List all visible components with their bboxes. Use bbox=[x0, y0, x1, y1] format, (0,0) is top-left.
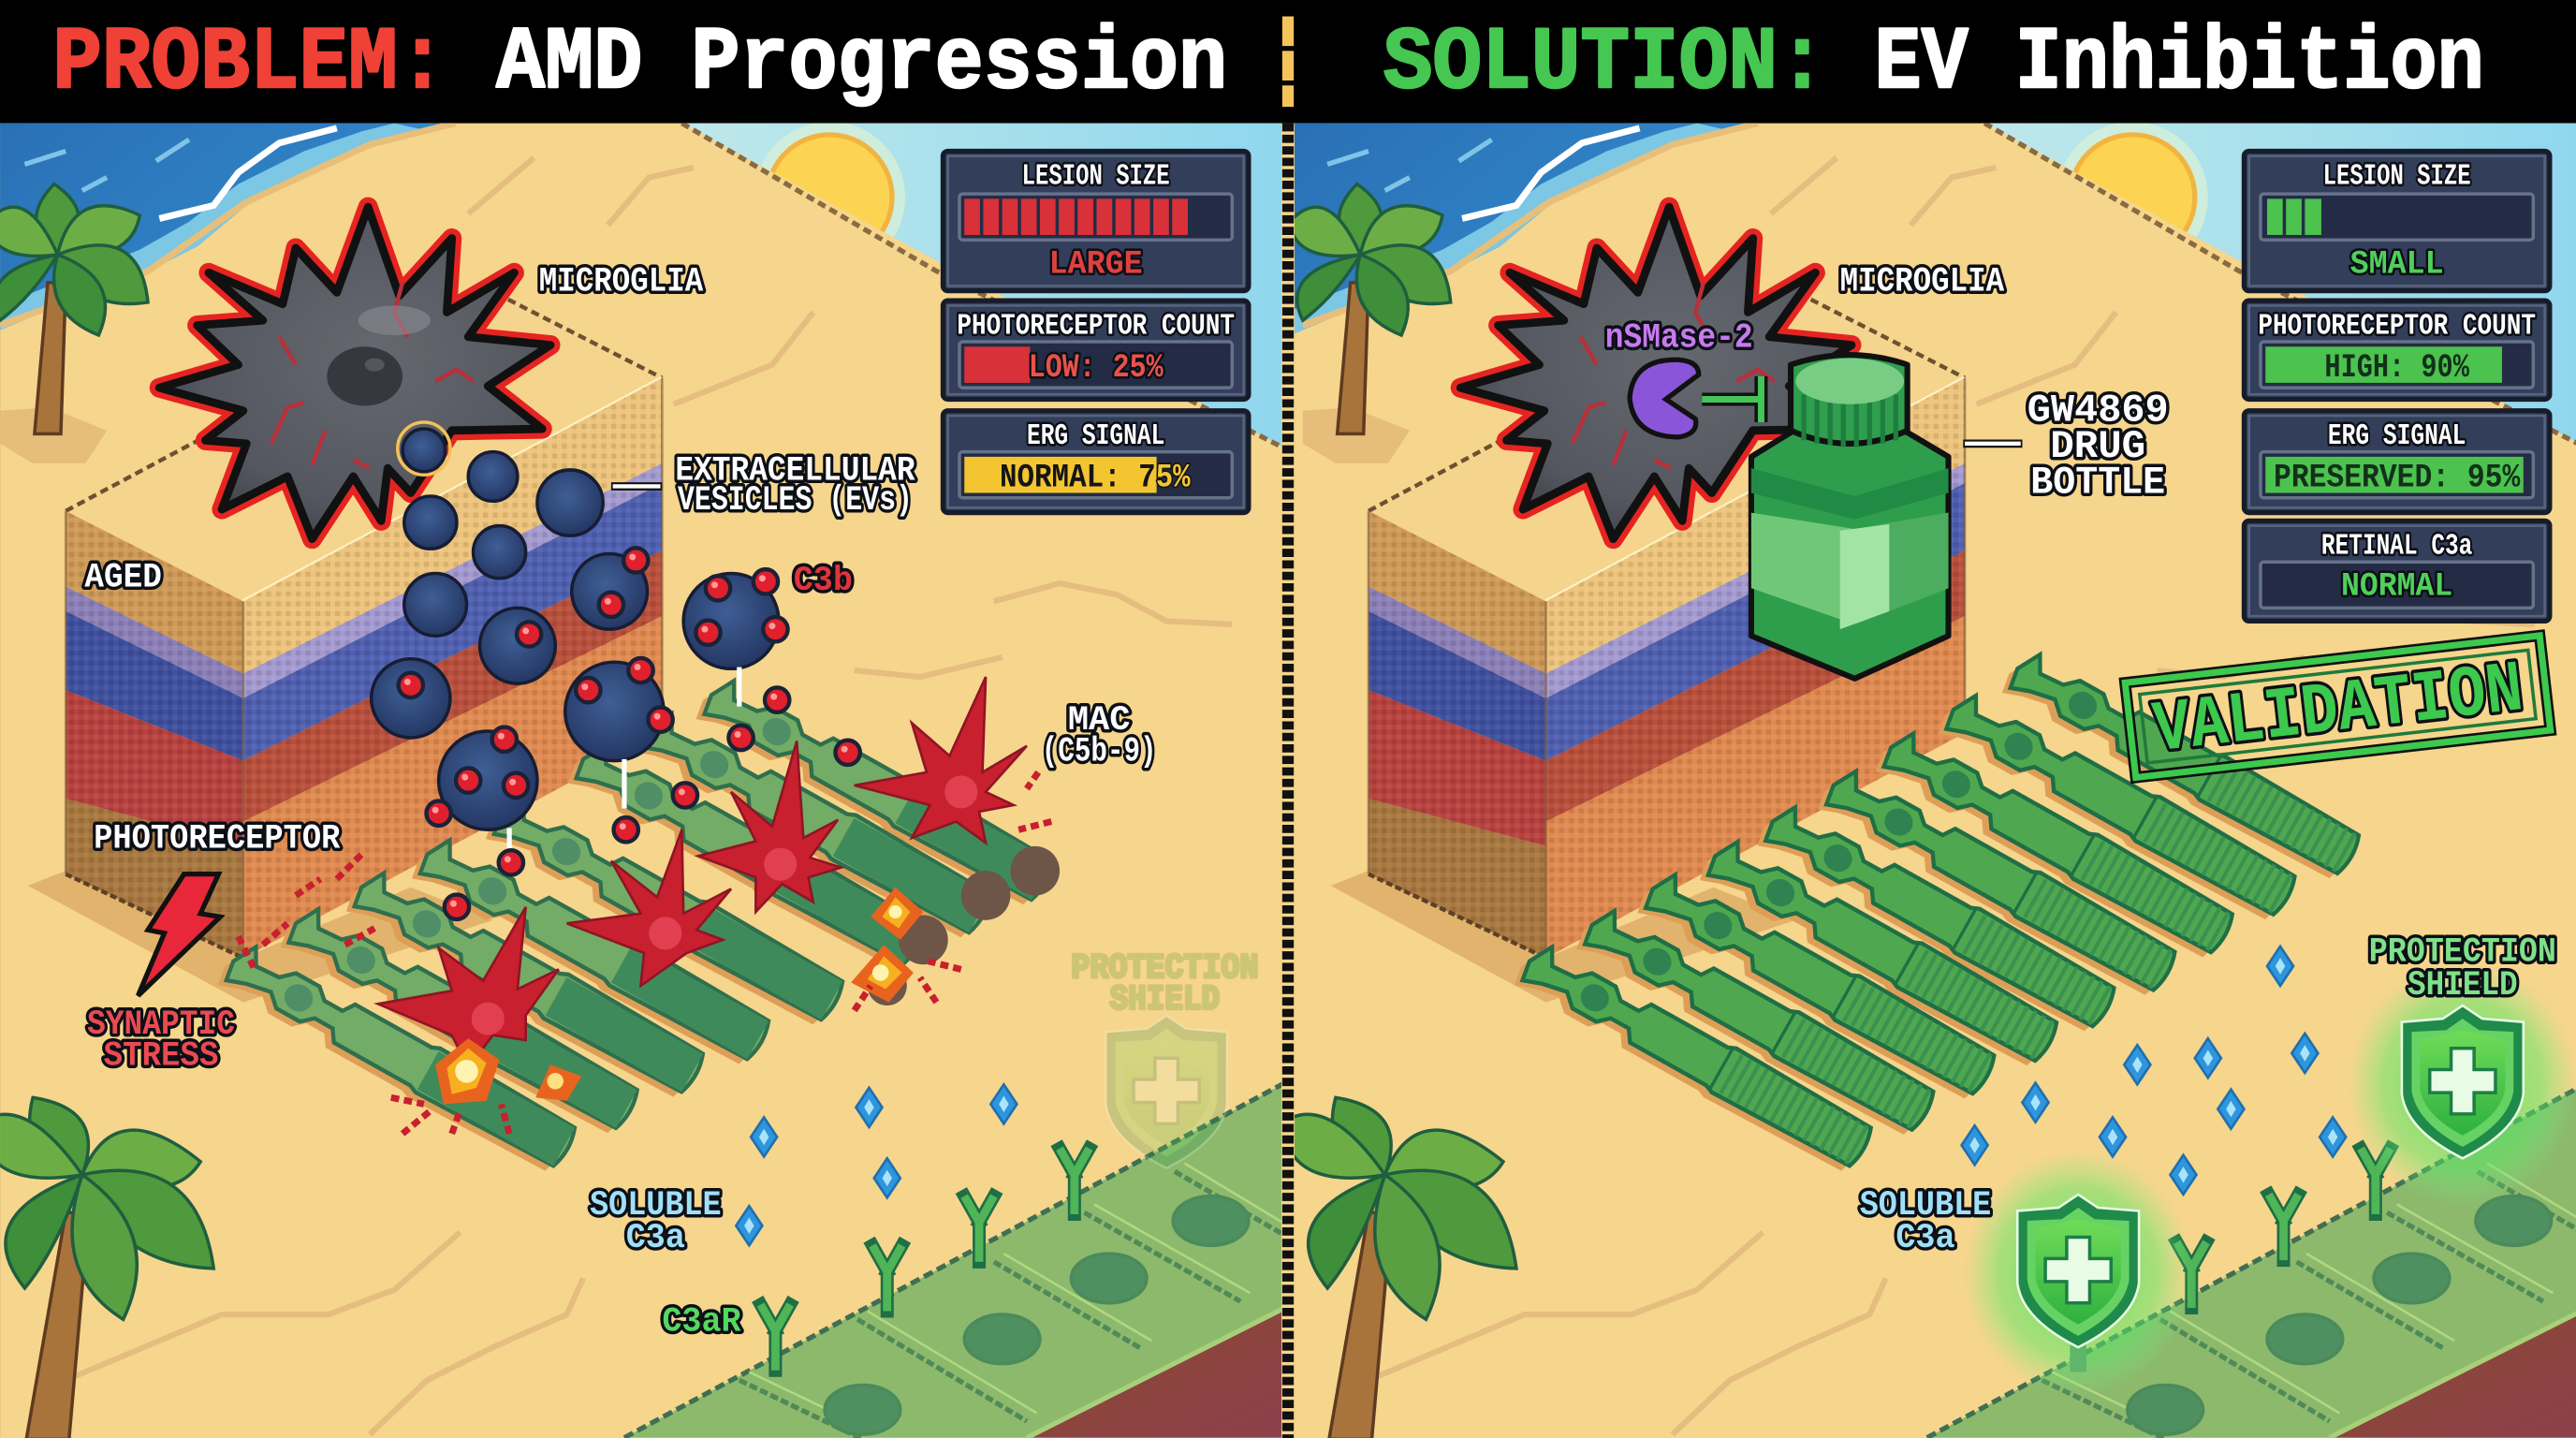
panel: photoreceptor count problem: PHOTORECEPTOR COUNT bbox=[957, 310, 1235, 343]
complement c3b dots bbox=[399, 548, 860, 919]
panel: erg signal problem: ERG SIGNAL bbox=[1027, 420, 1164, 453]
label: soluble c3a: C3a bbox=[626, 1219, 685, 1258]
heading: solution: SOLUTION: bbox=[1383, 14, 1827, 114]
panel: retinal c3a solution: NORMAL bbox=[2341, 567, 2452, 605]
photoreceptor rods bbox=[212, 670, 1060, 1178]
heading: problem: PROBLEM: bbox=[52, 14, 446, 114]
icon: synaptic stress bolt bbox=[138, 874, 220, 996]
panel: lesion size solution: LESION SIZE bbox=[2323, 161, 2471, 194]
panel: lesion size solution: SMALL bbox=[2350, 245, 2444, 283]
divider bbox=[1281, 17, 1295, 1438]
vesicles bbox=[372, 422, 779, 851]
label: mac bbox=[1042, 701, 1157, 772]
panel: lesion size problem bbox=[943, 151, 1249, 291]
label: synaptic stress: STRESS bbox=[104, 1036, 218, 1076]
panel: erg signal problem: NORMAL: 7 bbox=[1000, 459, 1156, 496]
label: aged: AGED bbox=[84, 559, 162, 598]
panel: erg signal problem: 5% bbox=[1156, 459, 1191, 496]
label: extracellular vesicles: EXTRACELLULAR bbox=[675, 451, 915, 491]
label: gw4869 drug bottle bbox=[1963, 388, 2169, 506]
microglia bbox=[159, 207, 550, 539]
panel: problem scene bbox=[0, 115, 1298, 1438]
c3a receptors bbox=[761, 1149, 1090, 1371]
protection shield lower bbox=[1963, 1151, 2193, 1397]
panel: lesion size problem: LESION SIZE bbox=[1022, 161, 1170, 194]
label: synaptic stress bbox=[87, 1005, 235, 1076]
faint protection shield bbox=[1105, 1016, 1227, 1168]
drug bottle bbox=[1751, 355, 1949, 679]
label: microglia right: MICROGLIA bbox=[1840, 263, 2005, 302]
label: microglia: MICROGLIA bbox=[539, 263, 704, 302]
soluble c3a droplets bbox=[1962, 946, 2346, 1195]
label: gw4869 drug bottle: GW4869 bbox=[2027, 388, 2169, 433]
label: extracellular vesicles bbox=[611, 451, 915, 521]
label: mac: MAC bbox=[1068, 701, 1131, 741]
label: soluble c3a right: C3a bbox=[1895, 1219, 1955, 1258]
panel: photoreceptor count solution: HIGH: 90% bbox=[2324, 349, 2470, 387]
heading: amd progression: AMD Progression bbox=[496, 14, 1227, 114]
panel: erg signal solution: ERG SIGNAL bbox=[2328, 420, 2466, 453]
c3a receptors bbox=[2176, 1149, 2391, 1308]
panel: retinal c3a solution: RETINAL C3a bbox=[2321, 530, 2472, 563]
panel: lesion size solution bbox=[2244, 151, 2550, 291]
label: c3ar: C3aR bbox=[662, 1303, 741, 1343]
panel: photoreceptor count problem: LOW: 25% bbox=[1029, 349, 1164, 387]
inhibitor bbox=[1702, 376, 1761, 422]
label: gw4869 drug bottle: BOTTLE bbox=[2030, 461, 2165, 506]
inhibitor highlight bbox=[1702, 376, 1761, 422]
label: protection shield: PROTECTION bbox=[2369, 933, 2556, 973]
microglia bbox=[1460, 207, 1852, 539]
label: mac: (C5b-9) bbox=[1042, 733, 1157, 772]
label: faint protection shield: SHIELD bbox=[1110, 981, 1220, 1020]
panel: solution scene bbox=[1283, 115, 2576, 1438]
mac complexes bbox=[378, 677, 1027, 1068]
label: faint protection shield bbox=[1071, 949, 1258, 1020]
explosions and splatter bbox=[239, 772, 1051, 1134]
beach and tissue block bbox=[0, 115, 1298, 1438]
enzyme: nSMase-2 crescent bbox=[1630, 360, 1699, 437]
panel: erg signal solution bbox=[2244, 411, 2550, 513]
healthy photoreceptor rods bbox=[1509, 644, 2364, 1178]
panel: photoreceptor count solution bbox=[2244, 301, 2550, 399]
panel: erg signal problem bbox=[943, 411, 1249, 513]
panel: erg signal solution: PRESERVED: 95% bbox=[2274, 459, 2521, 496]
label: nsmase-2: nSMase-2 bbox=[1605, 318, 1753, 358]
label: c3b: C3b bbox=[794, 562, 853, 601]
beach and tissue block bbox=[1283, 115, 2576, 1438]
label: soluble c3a right bbox=[1860, 1186, 1991, 1258]
label: soluble c3a right: SOLUBLE bbox=[1860, 1186, 1991, 1225]
label: gw4869 drug bottle: DRUG bbox=[2050, 424, 2145, 469]
soluble c3a droplets bbox=[736, 1084, 1017, 1245]
panel: lesion size problem: LARGE bbox=[1049, 245, 1143, 283]
label: protection shield bbox=[2369, 933, 2556, 1005]
heading: ev inhibition: EV Inhibition bbox=[1875, 14, 2484, 114]
title bar bbox=[0, 0, 2576, 125]
panel: retinal c3a solution bbox=[2244, 521, 2550, 621]
protection shield upper bbox=[2348, 961, 2576, 1208]
panel: photoreceptor count problem bbox=[943, 301, 1249, 399]
label: protection shield: SHIELD bbox=[2408, 966, 2518, 1005]
label: faint protection shield: PROTECTION bbox=[1071, 949, 1258, 989]
label: photoreceptor: PHOTORECEPTOR bbox=[94, 820, 341, 859]
label: soluble c3a bbox=[590, 1186, 722, 1258]
label: synaptic stress: SYNAPTIC bbox=[87, 1005, 235, 1045]
label: extracellular vesicles: VESICLES (EVs) bbox=[678, 481, 913, 521]
label: soluble c3a: SOLUBLE bbox=[590, 1186, 722, 1225]
